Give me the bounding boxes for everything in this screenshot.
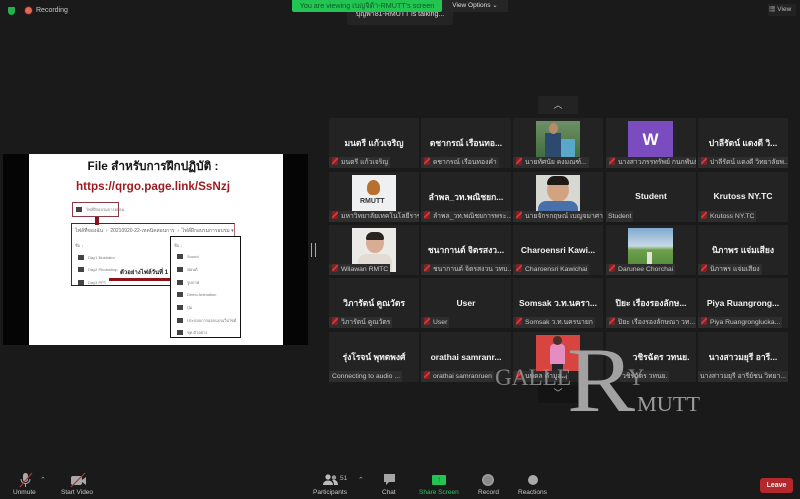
tile: photo woman [329, 225, 419, 275]
tile [698, 118, 788, 168]
tile: Connecting to audio ... [332, 373, 400, 380]
tile: photo woman: Wilawan RMTC [341, 266, 388, 273]
talking indicator: บุญพา81-RMUTT is talking... [356, 11, 444, 18]
panel: shared screen [3, 154, 308, 345]
tile: Somsak ว.ท.นครา... [519, 298, 597, 308]
talking indicator [347, 0, 453, 25]
tile: photo field: Darunee Chorchai [618, 266, 673, 273]
view options button: View Options ⌄ [452, 2, 498, 9]
tile: ปาลีรัตน์ แดงดี วิ... [709, 138, 777, 148]
viewing banner [292, 0, 442, 12]
arrow down [95, 217, 99, 225]
tile [329, 278, 419, 328]
tile: นางสาวมยุรี อารีย์ชน วิทยา... [700, 373, 786, 380]
folder list panel: Day2 Photoshop [88, 267, 118, 272]
folder detail panel: ประกอบการออกแบบเว็บไซต์ [187, 318, 236, 323]
tile: วชิรฉัตร วทนย. [622, 373, 667, 380]
toolbar: participants [313, 474, 364, 496]
tile: ลำพล_วท.พณิชยก... [429, 192, 503, 202]
tile [698, 278, 788, 328]
toolbar: start video [61, 472, 93, 496]
leave button [760, 478, 793, 493]
toolbar: unmute [13, 472, 46, 496]
icon: shield [8, 7, 15, 15]
tile: ลำพล_วท.พณิชยการพระ... [433, 213, 511, 220]
view button [768, 4, 796, 16]
toolbar: chat [382, 474, 396, 496]
participants chevron: ⌃ [358, 477, 364, 484]
tile [513, 278, 603, 328]
tile: Charoensri Kawi... [521, 245, 595, 255]
panel divider handle [311, 243, 316, 257]
folder detail panel: ชุด ตัวอย่าง [187, 330, 207, 335]
icon: share arrow [432, 475, 446, 485]
leave button: Leave [767, 482, 786, 489]
tile: มนตรี แก้วเจริญ [345, 138, 403, 148]
folder list panel: ชื่อ ↓ [75, 243, 83, 248]
tile [698, 332, 788, 382]
toolbar: record [478, 474, 499, 496]
tile: photo man [513, 172, 603, 222]
tile: ชนากานต์ จิตรสงวน วทบ... [433, 266, 511, 273]
tile: ปิยะ เรืองรองลักษณา วท... [618, 319, 695, 326]
tile: purple avatar [606, 118, 696, 168]
tile: photo red wall: นพดล คำมูล... [525, 373, 567, 380]
tile [698, 172, 788, 222]
slide [29, 154, 283, 345]
tile [329, 118, 419, 168]
icon: share arrow: ↑ [437, 475, 441, 484]
folder list panel: Day1 Illustrator [88, 255, 115, 260]
folder detail panel: Demo Animation [187, 292, 216, 297]
audio chevron: ⌃ [40, 477, 46, 484]
tile: orathai samranr... [431, 352, 501, 362]
participants label: Participants [313, 489, 347, 496]
tile [421, 278, 511, 328]
tile: photo couple [513, 118, 603, 168]
folder detail panel: ชื่อ ↓ [174, 243, 182, 248]
scroll up button [538, 96, 578, 114]
toolbar: share screen [419, 475, 459, 496]
recording label: Recording [36, 7, 68, 14]
icon: smiley [528, 475, 538, 485]
tile: วิภารัตน์ คูณวัตร [343, 298, 405, 308]
icon: muted mic [20, 472, 32, 488]
view button: ▦ View [769, 6, 791, 13]
tile: purple avatar: W [642, 130, 659, 149]
folder box [72, 202, 119, 217]
scroll down button: ﹀ [553, 388, 562, 398]
icon: chat bubble [384, 474, 395, 485]
tile: รุ่งโรจน์ พุทดพงศ์ [343, 352, 405, 362]
folder box: ไฟล์ฝึกอบรมการอบรม [86, 207, 124, 212]
watermark mutt: MUTT [637, 392, 700, 416]
slide title: File สำหรับการฝึกปฏิบัติ : [88, 159, 218, 173]
icon: record [482, 474, 494, 486]
viewing banner: You are viewing เบญจิต้า-RMUTT's screen [300, 1, 434, 10]
tile: ดชากรณ์ เรือนทอ... [430, 138, 502, 148]
chat label: Chat [382, 489, 396, 496]
tile: logo: RMUTT [360, 198, 384, 205]
scroll down button [538, 385, 578, 403]
tile [606, 278, 696, 328]
tile: User [457, 298, 475, 308]
tile: ปาลีรัตน์ แดงดี วิทยาลัยพ... [710, 159, 788, 166]
tile: Student [608, 213, 631, 220]
start video label: Start Video [61, 489, 93, 496]
tile: Charoensri Kawichai [525, 266, 587, 273]
tile: User [433, 319, 447, 326]
participant count: 51 [340, 475, 347, 482]
tile: Somsak ว.ท.นครนายก [525, 319, 593, 326]
tile [329, 332, 419, 382]
folder list panel [71, 223, 235, 286]
watermark gallery: GALLE [495, 365, 571, 390]
unmute label: Unmute [13, 489, 36, 496]
tile [513, 225, 603, 275]
folder list panel: Day3 PPT [88, 280, 106, 285]
icon: recording dot [25, 7, 32, 14]
tile: orathai samranruen [433, 373, 492, 380]
watermark y: Y [628, 365, 644, 390]
tile: ดชากรณ์ เรือนทองคำ [433, 159, 497, 166]
toolbar: reactions [518, 475, 547, 496]
arrow right [109, 278, 170, 281]
tile: photo field [606, 225, 696, 275]
tile: Piya Ruangrong... [707, 298, 779, 308]
icon: video off [70, 472, 86, 488]
reactions label: Reactions [518, 489, 547, 496]
tile: Piya Ruangronglucka... [710, 319, 780, 326]
tile: photo couple: นายทัศนัย คงมณฑ์... [525, 159, 587, 166]
folder detail panel: รูปภาพ [187, 280, 199, 285]
panel: participant grid [329, 118, 788, 382]
record label: Record [478, 489, 499, 496]
tile: logo [329, 172, 419, 222]
tile: Krutoss NY.TC [713, 191, 773, 201]
tile [421, 172, 511, 222]
share screen label: Share Screen [419, 489, 459, 496]
tile: photo red wall [513, 332, 603, 382]
watermark [495, 340, 700, 420]
tile [606, 332, 696, 382]
slide link: https://qrgo.page.link/SsNzj [76, 180, 230, 193]
tile [421, 332, 511, 382]
tile: นิภาพร แจ่มเสียง [712, 245, 774, 255]
scroll up button: ︿ [553, 100, 562, 110]
tile: photo man: นายจักรกฤษณ์ เบญจมาศา [525, 213, 603, 220]
tile: มนตรี แก้วเจริญ [341, 159, 388, 166]
view options button [442, 0, 508, 12]
tile: วิภารัตน์ คูณวัตร [341, 319, 390, 326]
folder detail panel [170, 236, 241, 338]
tile: ปิยะ เรืองรองลักษ... [616, 298, 686, 308]
tile: นิภาพร แจ่มเสียง [710, 266, 760, 273]
tile [421, 118, 511, 168]
tile: วชิรฉัตร วทนย. [633, 352, 689, 362]
tile: Student [635, 191, 667, 201]
tile: ชนากานต์ จิตรสงว... [428, 245, 504, 255]
tile [421, 225, 511, 275]
tile [698, 225, 788, 275]
icon: people [323, 474, 338, 485]
folder detail panel: ฟอนต์ [187, 267, 198, 272]
tile [606, 172, 696, 222]
folder detail panel: ปุ่ม [187, 305, 192, 310]
folder detail panel: Sound [187, 254, 199, 259]
top left status: recording [8, 6, 68, 16]
tile: Krutoss NY.TC [710, 213, 754, 220]
tile: นางสาวมยุรี อารี... [709, 352, 777, 362]
folder list panel: ไฟล์ที่ของฉัน › 20210920-22-เทคนิคสอนการ › ไฟล์ฝึกอบรมการอบรม ▾ [75, 228, 234, 234]
example label: ตัวอย่างไฟล์วันที่ 1 [120, 270, 168, 276]
